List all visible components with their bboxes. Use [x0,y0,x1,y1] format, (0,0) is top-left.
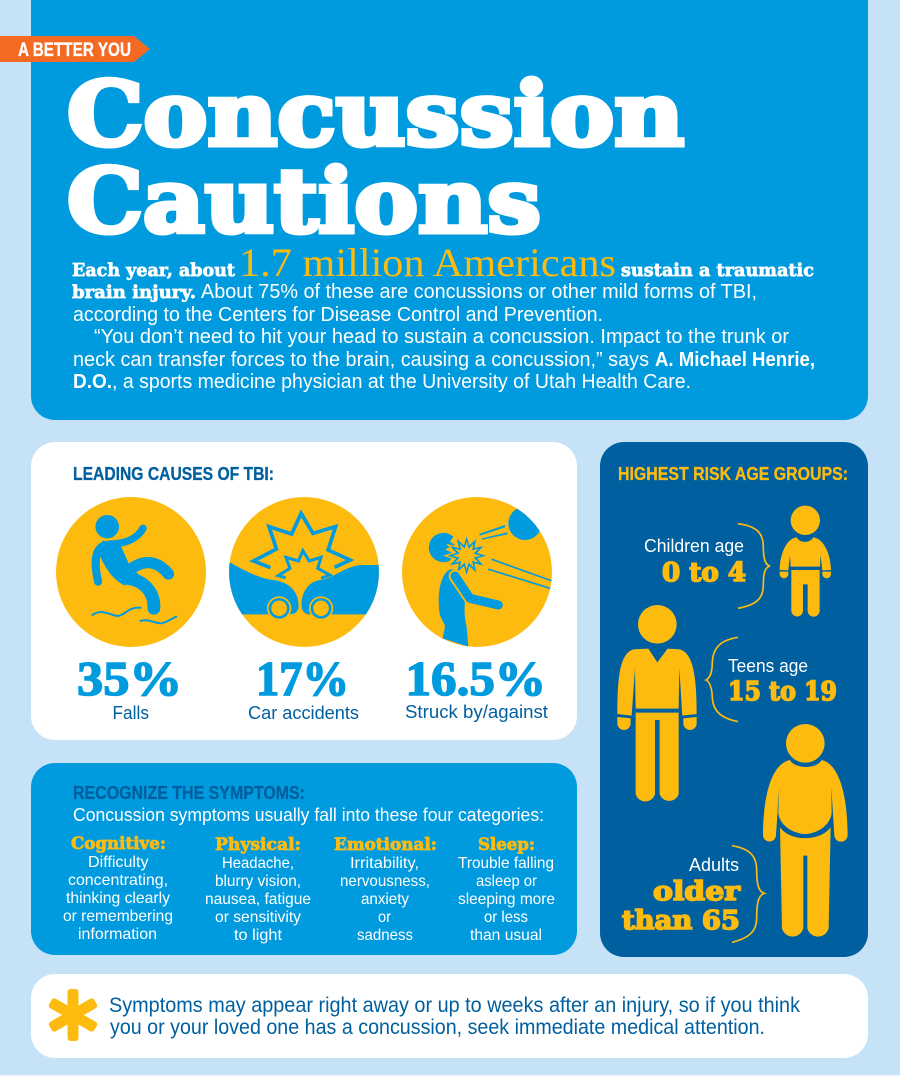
stat: falls: Falls [112,703,149,723]
column: physical: Physical: [215,835,301,855]
intro text: 1.7 million Americans [239,240,616,285]
column: emotional: or [378,909,392,926]
column: cognitive: information [78,926,157,943]
icon: asterisk [48,989,98,1041]
symptoms intro: Concussion symptoms usually fall into these four categories: [73,805,544,825]
intro text: About 75% of these are concussions or other mild forms of TBI, [201,281,757,303]
column: cognitive: Cognitive: [71,834,166,854]
note text [109,994,800,1039]
icon: fall [56,497,206,647]
column: emotional: Emotional: [334,835,437,855]
title: Concussion [67,62,684,166]
icon: struck by [402,497,552,647]
intro text: neck can transfer forces to the brain, causing a concussion,” says [73,349,649,371]
column: physical: to light [234,927,283,944]
panel: header [0,0,868,420]
column: cognitive: thinking clearly [66,890,170,907]
heading: recognize the symptoms: RECOGNIZE THE SYMPTOMS: [73,783,305,803]
column: emotional: anxiety [361,891,409,908]
intro text: “You don’t need to hit your head to sustain a concussion. Impact to the trunk or [94,326,789,348]
label: adults: Adults [689,855,739,875]
column: sleep: than usual [470,927,542,944]
intro text: Each year, about [72,260,236,281]
column: cognitive [63,834,173,943]
stat: car accidents: 17% [256,651,349,706]
intro text: D.O. [73,371,112,393]
column: sleep: Sleep: [478,835,535,855]
column: sleep: or less [484,909,528,926]
intro text: A. Michael Henrie, [655,349,815,371]
panel: bottom note [31,974,868,1058]
stat: struck by/against: 16.5% [406,651,546,706]
title: Cautions [67,149,541,253]
stat: struck by/against: Struck by/against [405,702,548,722]
intro text [72,240,815,393]
label: adults [622,855,740,936]
column: sleep [458,835,555,944]
column: cognitive: or remembering [63,908,173,925]
label: teens: Teens age [728,656,808,676]
panel: symptoms [31,763,577,955]
label: teens [728,656,837,707]
column: physical: nausea, fatigue [205,891,311,908]
column: sleep: Trouble falling [458,855,554,872]
column: cognitive: Difficulty [88,854,148,871]
label: teens: 15 to 19 [728,677,837,707]
column: emotional: sadness [357,927,413,944]
title [67,62,684,253]
note text: Symptoms may appear right away or up to weeks after an injury, so if you think [109,994,800,1017]
intro text: , a sports medicine physician at the University of Utah Health Care. [112,371,691,393]
heading: leading causes: LEADING CAUSES OF TBI: [73,464,274,484]
column: sleep: asleep or [476,873,538,890]
intro text: brain injury. [72,282,196,303]
column: emotional: Irritability, [350,855,419,872]
note text: you or your loved one has a concussion, seek immediate medical attention. [110,1016,765,1039]
column: physical: Headache, [222,855,294,872]
column: physical: blurry vision, [215,873,301,890]
label: children: Children age [644,536,744,556]
tag: A Better You: A BETTER YOU [18,40,131,61]
column: cognitive: concentrating, [68,872,168,889]
column: emotional [334,835,437,944]
figure: child and teen with braces [617,506,831,801]
column: physical [205,835,311,944]
panel: leading causes [31,442,577,740]
panel: highest risk age groups [600,442,868,957]
stat: car accidents: Car accidents [248,703,359,723]
figure: adult with brace [732,724,848,942]
stat: falls: 35% [77,651,182,706]
stat: car accidents [248,651,359,723]
tag: A Better You [0,36,150,62]
icon: car crash [222,497,385,647]
column: sleep: sleeping more [458,891,555,908]
heading: highest risk: HIGHEST RISK AGE GROUPS: [618,464,848,484]
label: children: 0 to 4 [662,558,746,588]
intro text: sustain a traumatic [621,260,814,281]
column: emotional: nervousness, [340,873,430,890]
label: adults: than 65 [622,906,740,936]
label: children [644,536,746,588]
intro text: according to the Centers for Disease Control and Prevention. [73,304,603,326]
label: adults: older [653,877,740,907]
column: physical: or sensitivity [215,909,301,926]
